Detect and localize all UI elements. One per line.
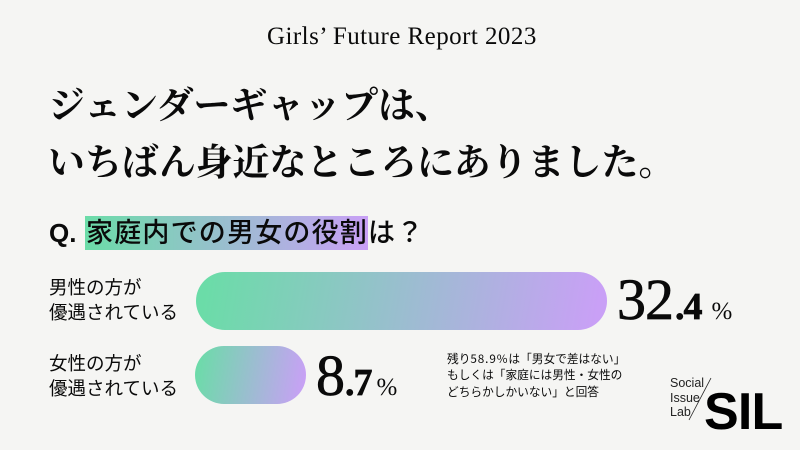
logo SIL: SIL (704, 383, 782, 441)
note: remaining answers: どちらかしかいない」と回答 (447, 383, 599, 400)
logo small text: Social (670, 376, 704, 390)
question heading: は？ (368, 211, 424, 250)
value: 8.7%: 8.7% (316, 343, 396, 408)
bar: women favored 8.7% (195, 346, 306, 404)
report title: Girls’ Future Report 2023 (267, 23, 537, 50)
logo: Social Issue Lab SIL (670, 376, 782, 441)
label: men favored: 優遇されている (49, 299, 178, 325)
main headline (48, 75, 675, 186)
label: men favored (49, 274, 178, 325)
main headline: いちばん身近なところにありました。 (48, 132, 675, 186)
note: remaining answers (447, 350, 625, 400)
question heading: Q. (49, 218, 76, 248)
label: men favored: 男性の方が (49, 274, 142, 300)
logo slash (688, 378, 712, 420)
logo small text: Lab (670, 405, 691, 419)
label: women favored: 優遇されている (49, 375, 178, 401)
bar: men favored 32.4% (196, 272, 607, 330)
value: 32.4%: 32.4 % (617, 267, 731, 332)
logo small text: Issue (670, 390, 700, 404)
main headline: ジェンダーギャップは、 (48, 75, 452, 129)
logo small text (670, 376, 704, 419)
question heading: 家庭内での男女の役割 (86, 211, 368, 250)
note: remaining answers: もしくは「家庭には男性・女性の (447, 366, 622, 383)
label: women favored (49, 350, 178, 401)
note: remaining answers: 残り58.9%は「男女で差はない」 (447, 350, 625, 367)
label: women favored: 女性の方が (49, 350, 142, 376)
